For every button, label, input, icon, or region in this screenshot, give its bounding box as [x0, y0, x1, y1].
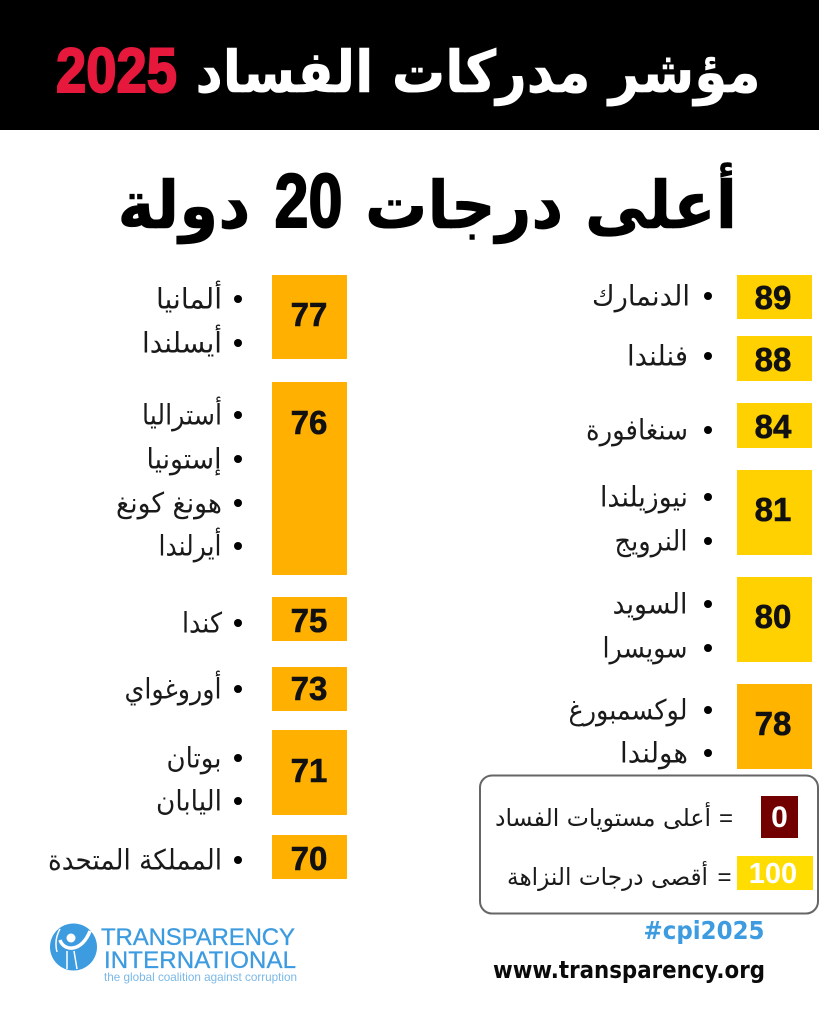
country: Iceland: أيسلندا: [142, 324, 222, 360]
country: Uruguay: أوروغواي: [124, 670, 222, 706]
score 89 bar: 89: [755, 279, 791, 316]
score 81 bar: 81: [755, 491, 791, 528]
country: Switzerland: سويسرا: [602, 632, 688, 664]
score 84 bar: 84: [755, 408, 792, 445]
heading number 20: 20: [274, 159, 342, 244]
country: Ireland: أيرلندا: [158, 526, 222, 562]
heading words: highest scores: أعلى درجات: [365, 162, 737, 244]
score 80 bar: [737, 577, 812, 662]
score 71 bar: 71: [291, 752, 327, 789]
logo word: International: INTERNATIONAL: [104, 947, 296, 974]
legend text: highest integrity: أقصى درجات النزاهة: [507, 861, 708, 891]
score 70 bar: [272, 835, 347, 879]
country: Sweden: السويد: [612, 588, 688, 620]
heading word: countries: دولة: [118, 167, 250, 245]
score 71 bar: [272, 730, 347, 815]
score 77 bar: [272, 275, 347, 359]
header title year: 2025: [56, 36, 177, 106]
country: Norway: النرويج: [614, 524, 688, 558]
country: Australia: أستراليا: [142, 396, 222, 432]
legend swatch 100: [737, 856, 813, 890]
legend equals sign bottom: =: [717, 864, 732, 891]
score 84 bar: [737, 403, 812, 448]
score 75 bar: 75: [291, 602, 327, 639]
score 76 bar: 76: [291, 404, 327, 441]
icon: globe with figure: [50, 924, 97, 970]
country: Finland: فنلندا: [627, 340, 688, 372]
country: New Zealand: نيوزيلندا: [600, 480, 688, 514]
score 88 bar: 88: [755, 341, 791, 378]
country: Japan: اليابان: [156, 784, 222, 818]
country: Luxembourg: لوكسمبورغ: [568, 694, 688, 726]
country: Denmark: الدنمارك: [592, 280, 690, 312]
score 78 bar: [737, 684, 812, 769]
website: www.transparency.org: [493, 956, 765, 984]
score 80 bar: 80: [755, 598, 791, 635]
legend panel: [480, 776, 818, 914]
country: Hong Kong: هونغ كونغ: [116, 486, 222, 520]
score 73 bar: [272, 667, 347, 711]
score 88 bar: [737, 336, 812, 381]
score 78 bar: 78: [755, 705, 791, 742]
logo word: Transparency: TRANSPARENCY: [101, 924, 295, 951]
score 81 bar: [737, 470, 812, 555]
country: Singapore: سنغافورة: [586, 414, 688, 446]
country: United Kingdom: المملكة المتحدة: [48, 844, 222, 876]
hashtag: #cpi2025: [644, 916, 764, 945]
main heading: [118, 159, 737, 245]
header banner: [0, 0, 819, 130]
legend swatch 100: 100: [749, 858, 797, 890]
score 75 bar: [272, 597, 347, 641]
score 70 bar: 70: [291, 840, 327, 877]
header title arabic: مؤشر مدركات الفساد: [196, 38, 760, 107]
country: Canada: كندا: [182, 606, 223, 640]
legend text: highest corruption: أعلى مستويات الفساد: [495, 802, 711, 832]
score 76 bar: [272, 382, 347, 575]
logo tagline: the global coalition against corruption: [104, 970, 297, 984]
legend equals sign top: =: [719, 805, 733, 832]
country: Bhutan: بوتان: [166, 742, 222, 774]
legend swatch 0: [761, 796, 798, 838]
country: Germany: ألمانيا: [156, 280, 222, 316]
score 73 bar: 73: [291, 670, 327, 707]
score 77 bar: 77: [291, 296, 327, 333]
country: Estonia: إستونيا: [146, 442, 222, 476]
score 89 bar: [737, 275, 812, 319]
legend swatch 0: 0: [771, 801, 788, 834]
Transparency International logo: [50, 924, 297, 984]
country: Netherlands: هولندا: [620, 736, 688, 770]
